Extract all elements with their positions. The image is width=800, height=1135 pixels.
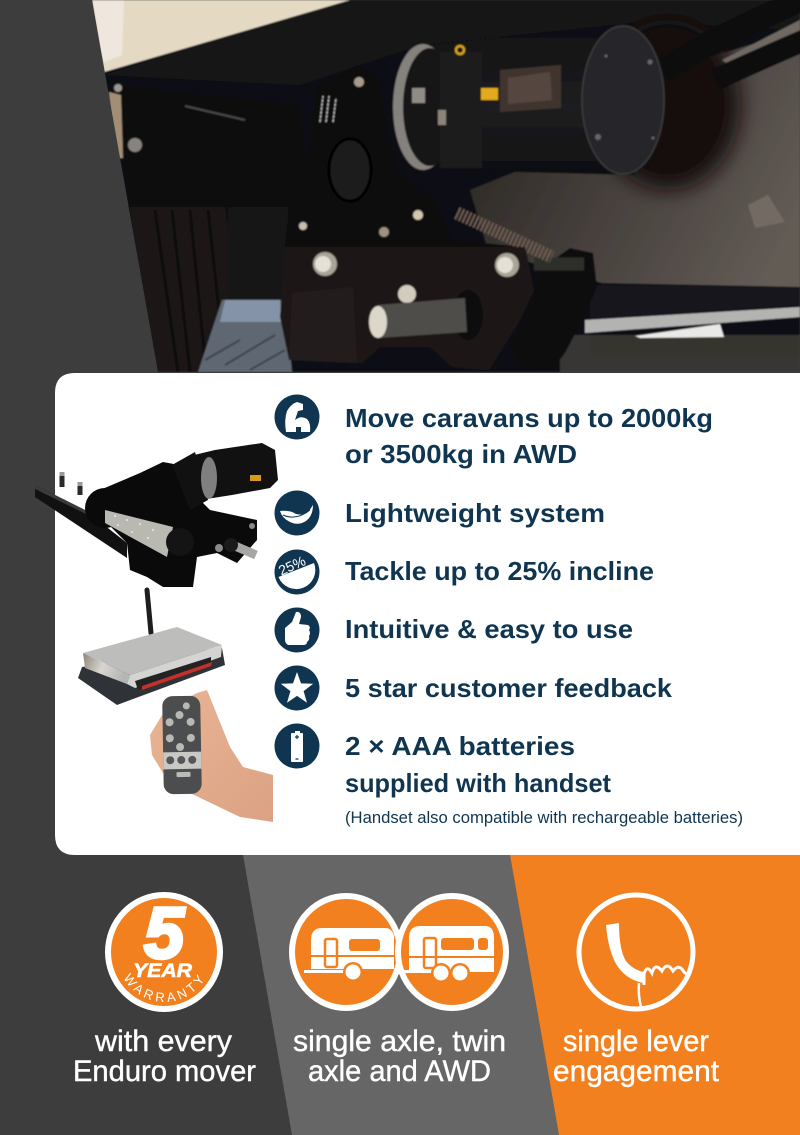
- panel: features: [55, 373, 800, 855]
- motor bridge: [172, 452, 208, 510]
- icon: 5 year warranty badge: [105, 892, 223, 1012]
- hoses: [662, 0, 800, 72]
- wall behind mover: [470, 30, 800, 287]
- caravan underside: [104, 0, 800, 85]
- feature list text: 2 × AAA batteries: [345, 731, 575, 761]
- feature list text: (Handset also compatible with rechargeable batteries): [345, 808, 743, 827]
- caption: lever: [553, 1025, 720, 1088]
- shaft: [378, 298, 467, 338]
- photo: mover fitted under caravan: [92, 0, 800, 372]
- icon: feather: [274, 490, 320, 536]
- caption: axle types: single axle, twin: [293, 1025, 506, 1058]
- chassis beam: [112, 85, 310, 210]
- icon: twin axle caravan badge: [398, 896, 506, 1008]
- caption: warranty: Enduro mover: [73, 1055, 256, 1088]
- lower plate: [280, 247, 534, 370]
- icon: 25 percent incline: [274, 550, 320, 594]
- caption: warranty: [73, 1025, 256, 1088]
- product: hand with remote handset: [150, 690, 273, 822]
- icon: star: [274, 666, 320, 710]
- icon: single axle caravan badge: [292, 896, 400, 1008]
- light upright: [722, 20, 800, 68]
- under-chassis dark: [228, 207, 288, 302]
- motor window: [500, 65, 561, 112]
- icon: muscle: [274, 394, 320, 440]
- caption: lever: single lever: [563, 1025, 709, 1058]
- product: mover unit: [35, 443, 278, 587]
- motor collar ring: [392, 42, 436, 172]
- icon: thumbs up: [274, 608, 320, 652]
- large bolts: [313, 252, 337, 276]
- ground right: [560, 335, 800, 372]
- yellow tab: [481, 88, 498, 100]
- caravan window frame: [92, 0, 124, 62]
- feature list text: 5 star customer feedback: [345, 673, 673, 703]
- feature list text: Lightweight system: [345, 498, 605, 528]
- caption: axle types: [293, 1025, 506, 1088]
- caption: axle types: axle and AWD: [308, 1055, 491, 1088]
- block: [292, 360, 357, 364]
- black rail: [590, 285, 800, 318]
- motor shadow: [596, 20, 740, 190]
- end cap: [581, 25, 665, 175]
- feature list text: [345, 403, 743, 827]
- glass circle: [329, 139, 371, 201]
- spring: [457, 213, 552, 257]
- caption: lever: engagement: [553, 1055, 720, 1088]
- icon: 5 year warranty badge: 5: [144, 894, 185, 974]
- hedge: [638, 334, 708, 340]
- silver rail: [585, 307, 800, 333]
- bracket bolts: [354, 77, 364, 87]
- upper bracket plate: [285, 65, 535, 290]
- tyre: [130, 207, 235, 372]
- rear plate: [511, 248, 597, 370]
- feature list text: or 3500kg in AWD: [345, 439, 577, 469]
- reflective patch: [748, 195, 785, 228]
- yellow ring: [456, 46, 464, 54]
- icon: 5 year warranty badge: YEAR: [133, 961, 192, 982]
- icon: 25 percent incline: 25%: [276, 552, 308, 578]
- icon: single lever with hand: [579, 895, 693, 1009]
- tan strip: [109, 92, 123, 158]
- spindle: [534, 258, 584, 270]
- panel: grey band: [243, 855, 559, 1135]
- feature list text: Move caravans up to 2000kg: [345, 403, 713, 433]
- feature list text: Intuitive & easy to use: [345, 614, 633, 644]
- plate label lines: [320, 96, 336, 122]
- caption: warranty: with every: [94, 1025, 232, 1058]
- shaft collar: [458, 290, 483, 340]
- panel: orange band: [510, 855, 800, 1135]
- feature list text: Tackle up to 25% incline: [345, 556, 654, 586]
- icon: 5 year warranty badge: WARRANTY: [124, 972, 203, 1002]
- icon: battery: [274, 724, 320, 768]
- caravan cream body: [92, 0, 350, 72]
- product: control box: [78, 590, 225, 705]
- feature list text: supplied with handset: [345, 768, 611, 798]
- motor body: [407, 25, 635, 175]
- paving: [198, 300, 292, 372]
- beam glint: [185, 106, 245, 120]
